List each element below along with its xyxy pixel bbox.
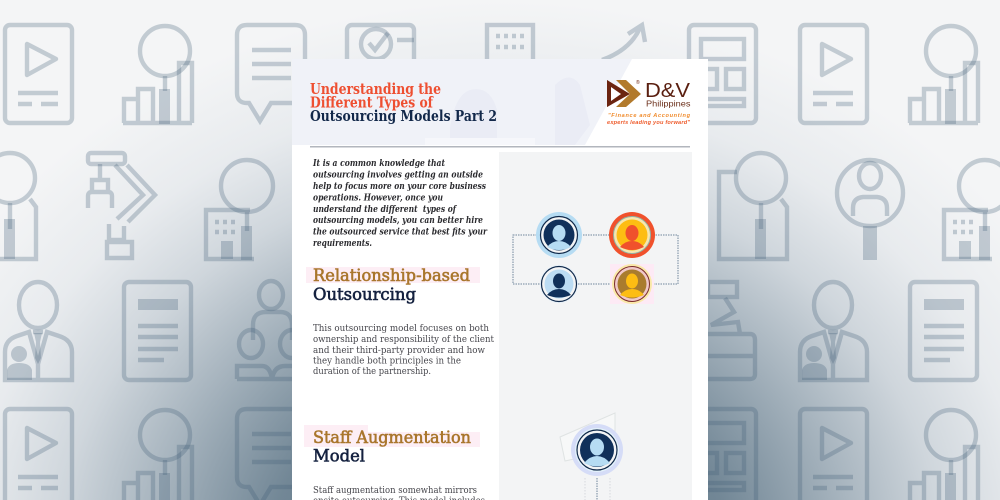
icon: magnifier over chart bbox=[123, 410, 192, 500]
section heading: relationship-based outsourcing: Relationship-based bbox=[313, 266, 470, 285]
node: blue bbox=[571, 424, 623, 476]
intro text: the outsourced service that best fits your bbox=[313, 226, 488, 238]
intro text: help to focus more on your core business bbox=[313, 181, 486, 192]
tagline: "Finance and Accounting bbox=[608, 113, 691, 119]
node: blue top left bbox=[536, 212, 582, 258]
intro text: outsourcing models, you can better hire bbox=[313, 215, 483, 226]
diagram: staff augmentation bbox=[560, 413, 623, 500]
icon: document bbox=[124, 282, 191, 380]
icon pattern: right side bbox=[689, 25, 1000, 500]
icon: speech bubble bbox=[237, 409, 305, 500]
icon pattern: top peeking above panel bbox=[347, 25, 645, 123]
intro text: requirements. bbox=[313, 238, 372, 249]
icon: play document bbox=[5, 25, 72, 123]
logo mark bbox=[607, 80, 641, 107]
icon: play document bbox=[800, 409, 867, 500]
panel: illustration backdrop bbox=[499, 152, 692, 500]
icon: growth arrow bbox=[602, 25, 645, 60]
title: Understanding the bbox=[310, 81, 441, 98]
section text: relationship-based: duration of the partnership. bbox=[313, 366, 431, 377]
tagline bbox=[607, 113, 691, 126]
icon: group of people bbox=[237, 281, 304, 379]
section heading: relationship-based outsourcing bbox=[306, 266, 480, 304]
node: amber bottom right bbox=[610, 264, 654, 304]
icon: hand on stack bbox=[706, 282, 755, 379]
logo: D&V Philippines: D&V bbox=[645, 80, 691, 102]
icon: magnifier over chart bbox=[123, 26, 192, 124]
intro text: understand the different types of bbox=[313, 204, 458, 215]
node: orange top right bbox=[609, 212, 655, 258]
panel: infographic sheet bbox=[292, 59, 708, 500]
icon: person in magnifier bbox=[837, 160, 903, 260]
icon: layout bbox=[689, 25, 756, 123]
logo: D&V Philippines: ® bbox=[636, 79, 640, 86]
section text: relationship-based: ownership and responsibility of the client bbox=[313, 334, 494, 345]
logo: D&V Philippines bbox=[607, 79, 691, 126]
icon: document bbox=[910, 282, 977, 380]
node: blue bottom left bbox=[540, 265, 578, 303]
header band bbox=[292, 59, 632, 145]
icon: magnifier over chart bbox=[909, 410, 978, 500]
icon: magnifier over building bbox=[206, 160, 273, 260]
icon: building bbox=[487, 25, 533, 123]
tagline: experts leading you forward" bbox=[607, 120, 690, 126]
icon: businessman bbox=[5, 282, 72, 380]
icon: layout bbox=[689, 409, 756, 500]
header rule bbox=[310, 146, 690, 148]
icon: robot arm bbox=[88, 153, 155, 258]
title: Outsourcing Models Part 2 bbox=[310, 108, 497, 125]
logo: D&V Philippines: Philippines bbox=[646, 98, 690, 108]
section heading: staff augmentation model: Staff Augmentation bbox=[313, 428, 471, 447]
title: Different Types of bbox=[310, 94, 434, 112]
icon: magnifier over chart bbox=[909, 26, 978, 124]
intro text: operations. However, once you bbox=[313, 192, 443, 204]
section text: relationship-based: and their third-party provider and how bbox=[313, 345, 485, 356]
icon: play document bbox=[5, 409, 72, 500]
icon pattern: left side bbox=[0, 25, 305, 500]
icon: magnifier over building bbox=[944, 160, 1000, 260]
icon: check document bbox=[347, 25, 414, 123]
intro text: It is a common knowledge that bbox=[312, 158, 446, 169]
intro text bbox=[312, 158, 488, 249]
section text: relationship-based: they handle both principles in the bbox=[313, 356, 461, 366]
intro text: outsourcing involves getting an outside bbox=[313, 170, 483, 180]
icon: play document bbox=[800, 25, 867, 123]
title bbox=[310, 81, 497, 125]
section text: relationship-based bbox=[313, 323, 494, 377]
section heading: staff augmentation model bbox=[304, 425, 480, 466]
icon: speech bubble bbox=[237, 25, 305, 121]
section text: relationship-based: This outsourcing model focuses on both bbox=[313, 323, 489, 334]
icon: magnifier over document bbox=[719, 153, 787, 259]
icon: magnifier over document bbox=[0, 153, 36, 259]
section heading: staff augmentation model: Model bbox=[313, 446, 365, 466]
diagram: relationship network bbox=[513, 212, 678, 304]
section text: staff augmentation: Staff augmentation somewhat mirrors bbox=[313, 485, 477, 496]
icon: businessman bbox=[800, 282, 867, 380]
section heading: relationship-based outsourcing: Outsourcing bbox=[313, 285, 416, 304]
